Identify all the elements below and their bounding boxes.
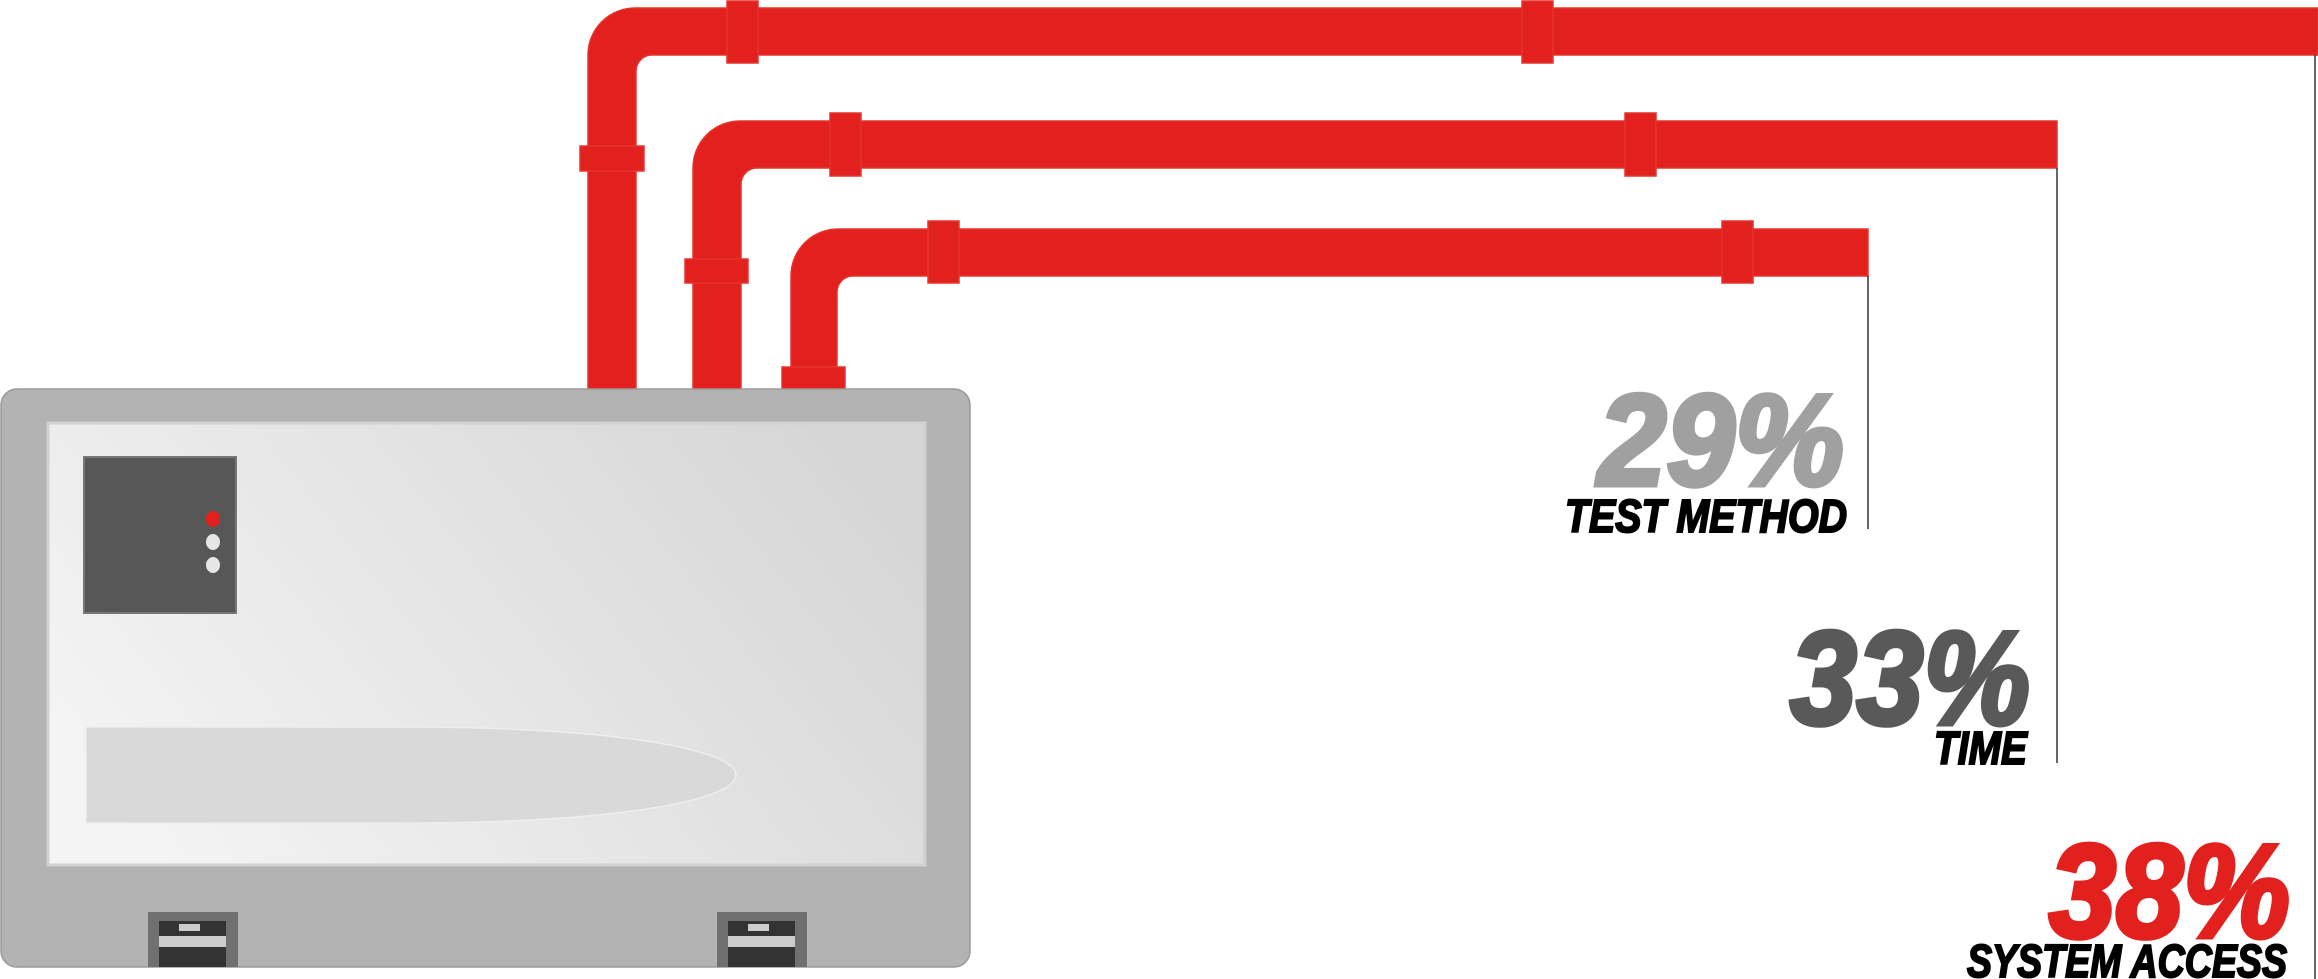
device control box: [84, 457, 236, 613]
stat: 29% test method: TEST METHOD: [1565, 490, 1847, 542]
stat: 33% time: 33%: [1790, 605, 2030, 753]
stat: 33% time: TIME: [1934, 722, 2028, 774]
stat: 38% system access: 38%: [2049, 818, 2290, 966]
pipe: bottom (test method): [782, 221, 1868, 392]
stat: 29% test method: 29%: [1595, 367, 1844, 513]
device: boiler unit: [1, 389, 970, 967]
stat: 38% system access: [1967, 818, 2290, 979]
device swoosh: [86, 727, 736, 823]
pipe: top (system access): [580, 1, 2318, 392]
leader lines: [1868, 55, 2315, 979]
device front panel: [48, 423, 925, 865]
pipe: middle (time): [685, 113, 2057, 392]
device feet: [148, 912, 807, 967]
